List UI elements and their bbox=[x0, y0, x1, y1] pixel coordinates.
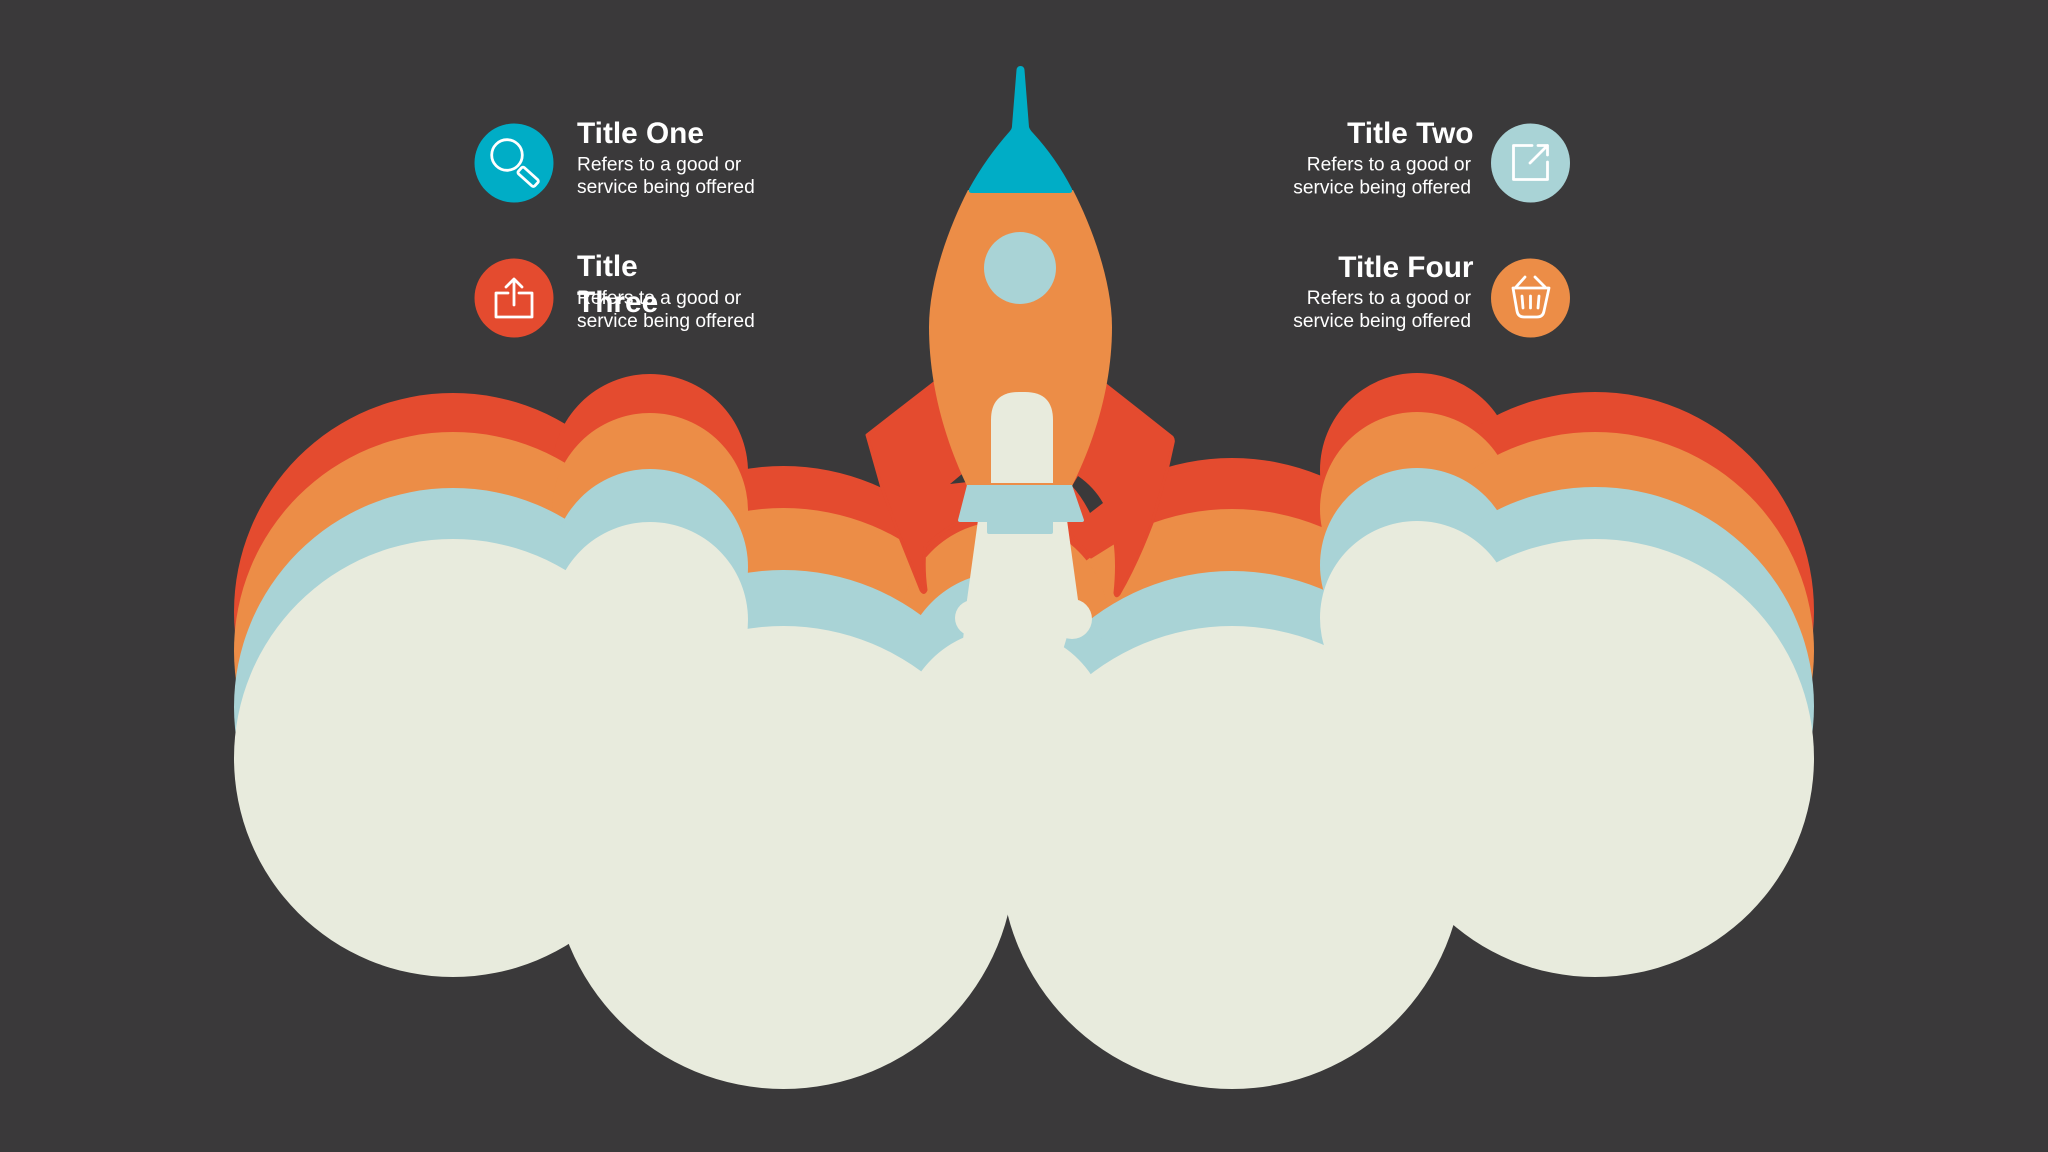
rocket bbox=[929, 66, 1112, 650]
heading: Three bbox=[577, 286, 658, 319]
body text: service being offered bbox=[577, 311, 755, 332]
cloud layer: cream bbox=[234, 521, 1814, 1089]
body text: service being offered bbox=[577, 177, 755, 198]
item: Title Two bbox=[1293, 117, 1570, 202]
nose cone bbox=[969, 66, 1072, 193]
icon: external link bbox=[1491, 124, 1570, 202]
item: Title Four bbox=[1293, 251, 1570, 338]
right fin bbox=[1060, 385, 1173, 596]
rocket fins bbox=[867, 383, 1173, 596]
icon: share bbox=[474, 258, 554, 338]
cloud layer: red bbox=[234, 373, 1814, 929]
body text: Refers to a good or bbox=[577, 154, 741, 176]
body text: Refers to a good or bbox=[1307, 154, 1471, 176]
heading: Title Two bbox=[1347, 117, 1474, 150]
body text: service being offered bbox=[1293, 178, 1471, 198]
icon: basket bbox=[1491, 258, 1570, 338]
item: Title One bbox=[474, 117, 755, 202]
heading: Title Four bbox=[1338, 251, 1474, 284]
heading: Title bbox=[577, 250, 638, 283]
cloud layer: light blue bbox=[234, 468, 1814, 1034]
fin gaps bbox=[950, 474, 1103, 513]
icon: magnifier bbox=[474, 124, 554, 202]
rocket body bbox=[929, 190, 1112, 486]
body text: Refers to a good or bbox=[577, 288, 741, 309]
heading: Title One bbox=[577, 117, 704, 150]
item: Title Three bbox=[474, 250, 755, 338]
window bbox=[984, 232, 1056, 304]
left fin bbox=[867, 383, 975, 592]
body text: service being offered bbox=[1293, 311, 1471, 332]
cloud layer: orange bbox=[234, 412, 1814, 972]
door bbox=[991, 392, 1053, 483]
body text: Refers to a good or bbox=[1307, 288, 1471, 309]
exhaust plume bbox=[955, 520, 1092, 650]
nozzle bbox=[958, 485, 1084, 534]
